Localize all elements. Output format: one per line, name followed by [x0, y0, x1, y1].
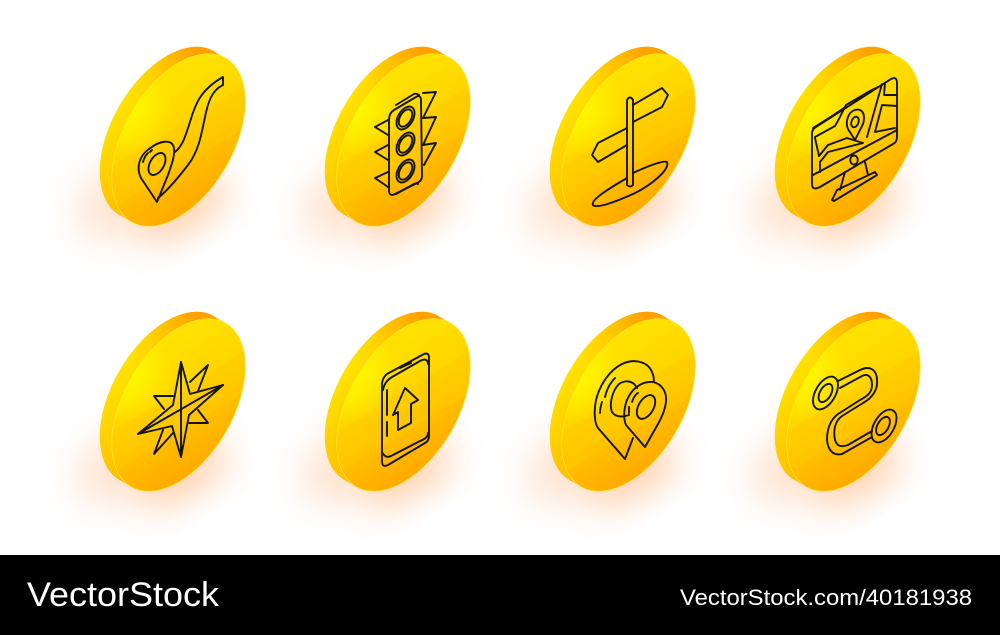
- footer bar: [0, 555, 1000, 635]
- icon: monitor with map: [812, 78, 897, 201]
- coin: route between two points: [736, 312, 920, 523]
- icon: pin and winding road: [139, 77, 223, 202]
- footer brand name: VectorStock: [27, 576, 220, 614]
- icon: route with two end rings: [808, 368, 902, 454]
- icon: smartphone with up arrow: [382, 354, 429, 466]
- footer image URL: VectorStock.com/40181938: [680, 585, 972, 610]
- coin: traffic light: [286, 47, 470, 258]
- icon: traffic light: [375, 92, 436, 195]
- coin: compass rose: [61, 312, 245, 523]
- icon: two location pins: [595, 361, 666, 459]
- icon: signpost: [592, 88, 668, 206]
- icon: wind rose star: [138, 362, 223, 457]
- coin: two map pins: [511, 312, 695, 523]
- coin: road signpost: [511, 47, 695, 258]
- coin: location pin with road: [61, 47, 245, 258]
- coin: smartphone with arrow: [286, 312, 470, 523]
- coin: monitor with map: [736, 47, 920, 258]
